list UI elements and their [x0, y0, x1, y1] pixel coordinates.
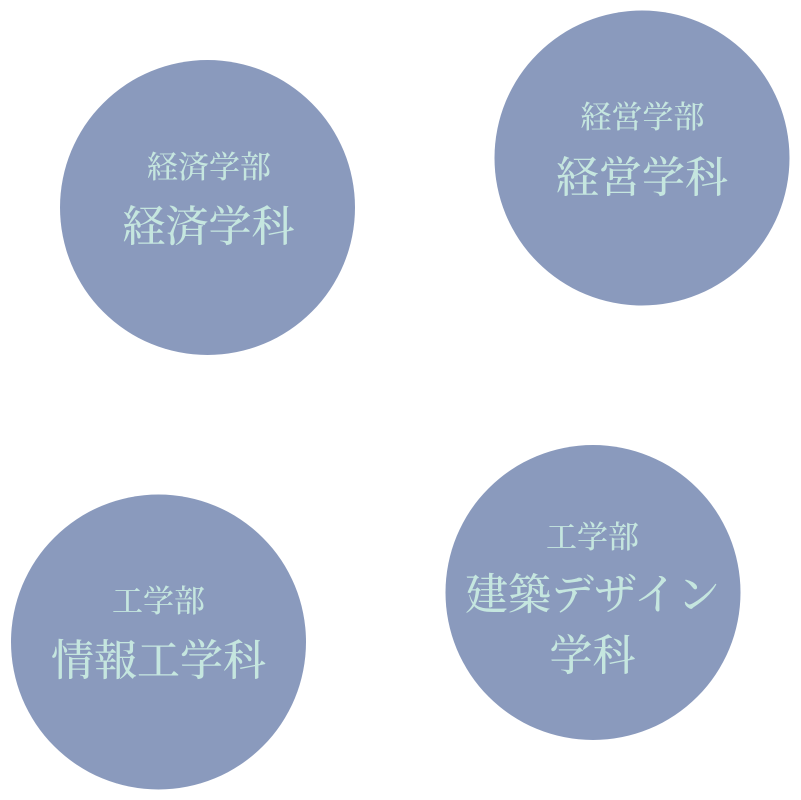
- faculty label: information engineering: 工学部: [112, 584, 205, 619]
- department label: information engineering: 情報工学科: [51, 638, 266, 686]
- department label line 1: architectural design: 建築デザイン: [465, 572, 720, 620]
- department label: economics: 経済学科: [122, 204, 294, 252]
- panel: information engineering circle: [11, 494, 306, 790]
- faculty label: economics: 経済学部: [147, 150, 271, 185]
- faculty label: business: 経営学部: [580, 100, 704, 135]
- panel: economics circle: [60, 60, 355, 355]
- panel: business circle: [494, 10, 790, 306]
- department label: business: 経営学科: [556, 156, 728, 202]
- department label line 2: architectural design: 学科: [550, 634, 636, 680]
- panel: architectural design circle: [446, 445, 740, 740]
- faculty label: architectural design: 工学部: [546, 520, 639, 555]
